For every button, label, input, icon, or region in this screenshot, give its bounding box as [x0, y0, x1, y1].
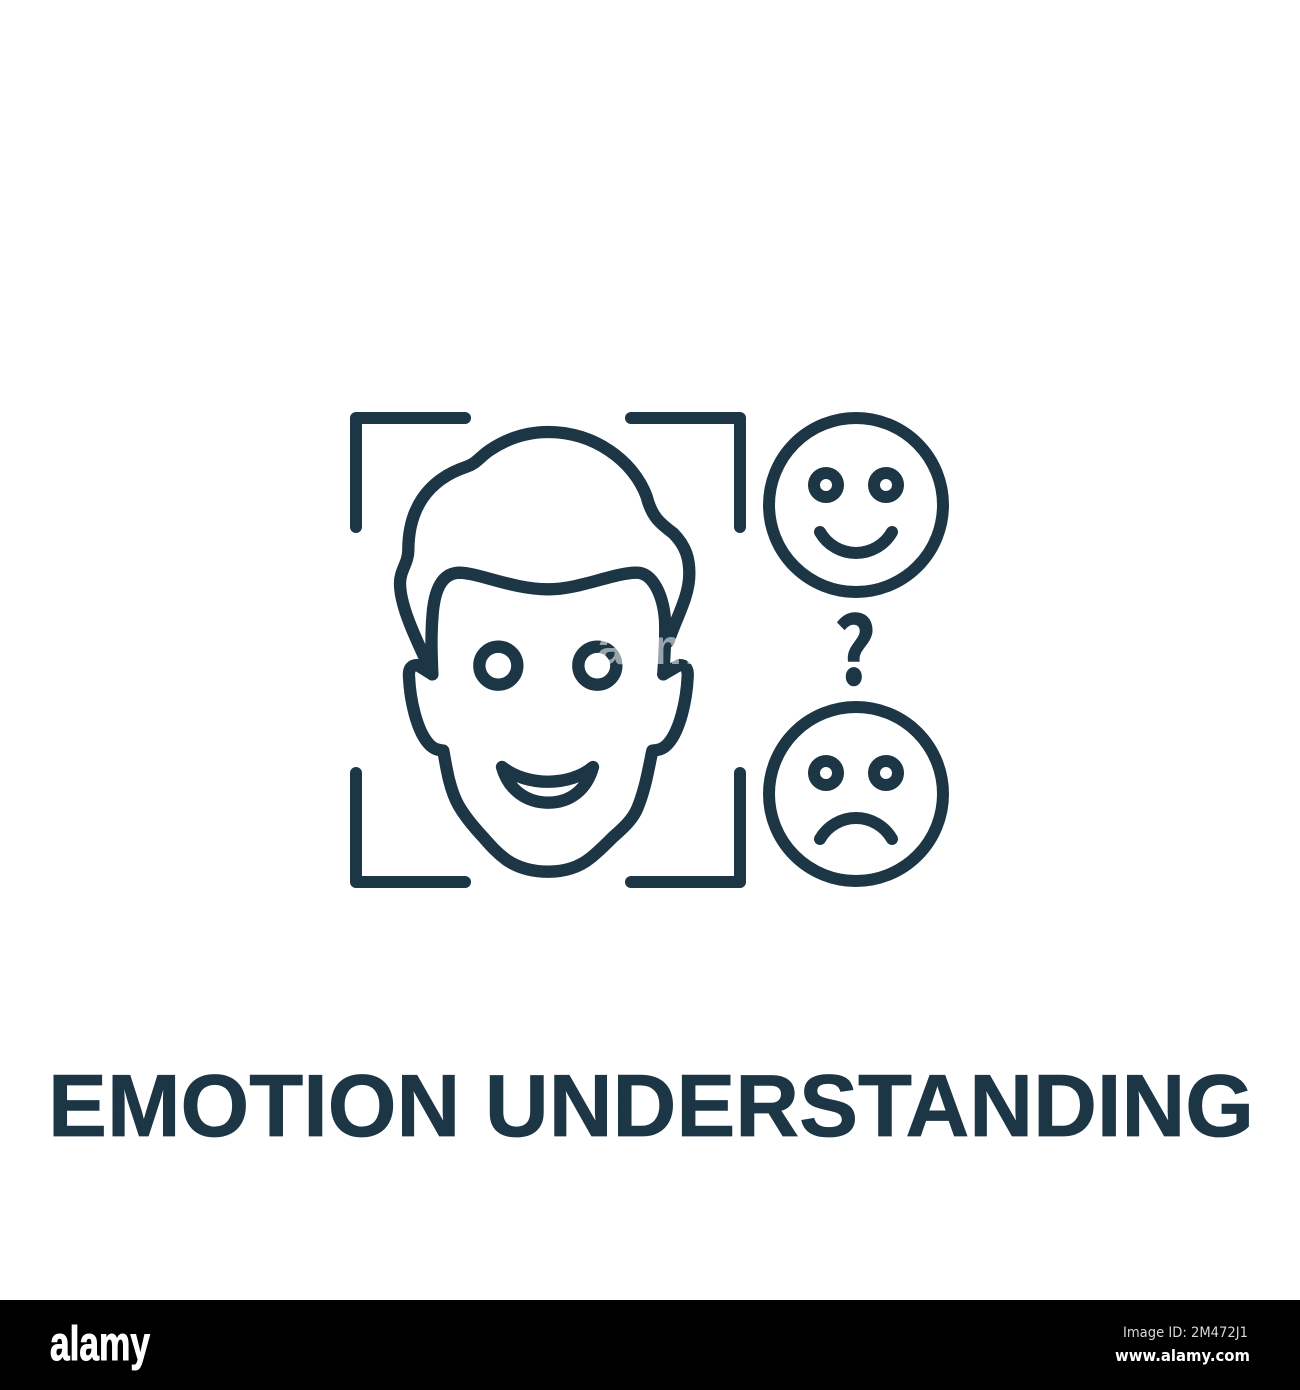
icon: face scan frame [356, 418, 740, 882]
icon: emotion understanding [356, 418, 943, 882]
left eye [479, 647, 517, 685]
open smile [502, 767, 593, 803]
website: www.alamy.com [1115, 1346, 1250, 1365]
face and ears outline [409, 665, 688, 872]
right eye [578, 647, 616, 685]
icon: question mark: ? [834, 577, 876, 711]
watermark fragment [597, 619, 697, 675]
footer bar [0, 1300, 1300, 1390]
watermark fragment: m [653, 619, 697, 675]
image id: Image ID: 2M472J1 [1123, 1325, 1248, 1341]
icon: smiling man's face [400, 432, 689, 872]
watermark fragment: a [597, 619, 626, 675]
icon: sad emoji [769, 707, 943, 881]
logo: alamy: alamy [50, 1318, 150, 1371]
hairline [431, 573, 665, 674]
icon: happy emoji [769, 418, 943, 592]
hair outline [400, 432, 689, 663]
title: EMOTION UNDERSTANDING [48, 1056, 1254, 1155]
